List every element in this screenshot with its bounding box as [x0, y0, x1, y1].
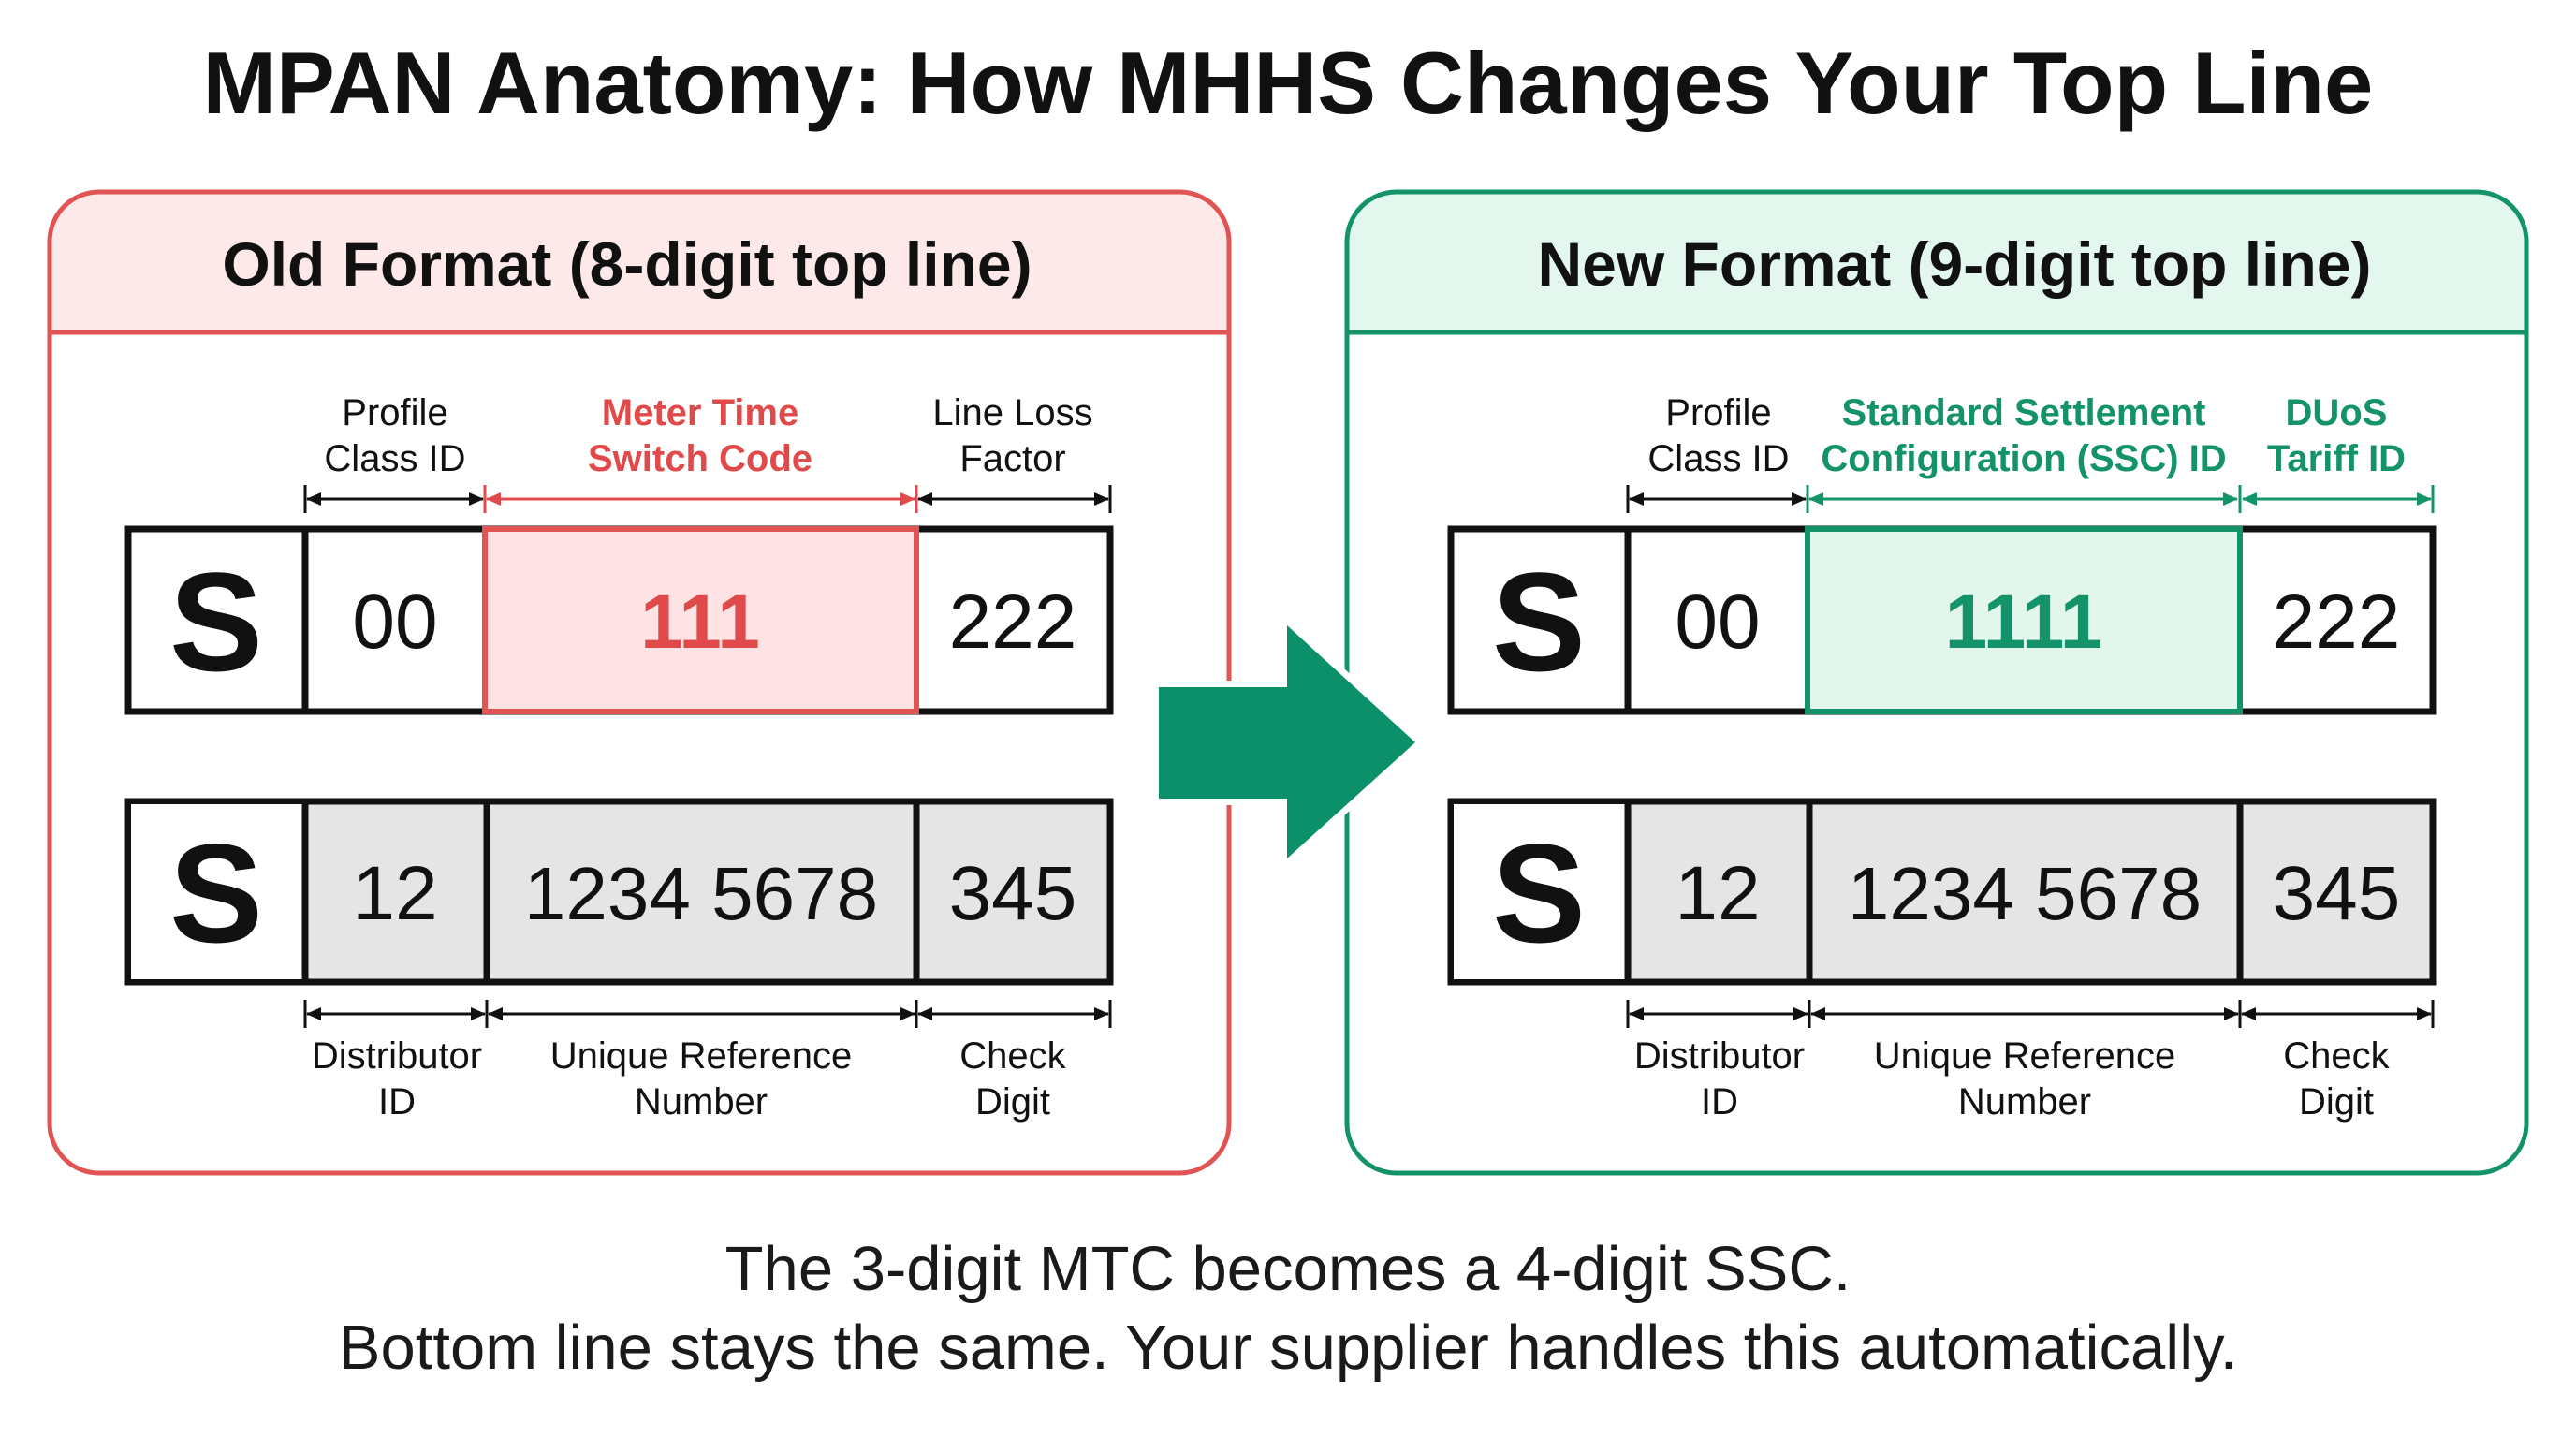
new bottom labels: Distributor [1634, 1035, 1805, 1077]
new top line boxes: 222 [2273, 580, 2400, 665]
new bottom line boxes: 345 [2273, 851, 2400, 936]
new top line boxes: 1111 [1945, 580, 2102, 665]
old top line boxes: 222 [949, 580, 1076, 665]
new top line boxes [1451, 529, 2433, 712]
new top labels: Configuration (SSC) ID [1821, 438, 2227, 479]
new top dimension arrows [1628, 485, 2433, 513]
old bottom line boxes: S [169, 814, 263, 972]
title: MPAN Anatomy: How MHHS Changes Your Top Line [203, 34, 2373, 132]
arrow: old to new [1159, 625, 1415, 858]
old bottom labels [312, 1035, 1067, 1123]
old bottom labels: Distributor [312, 1035, 482, 1077]
old bottom labels: Digit [975, 1081, 1050, 1123]
old top labels: Profile [342, 392, 448, 433]
old bottom labels: Unique Reference [550, 1035, 852, 1077]
old top labels: Line Loss [932, 392, 1093, 433]
old top line boxes: S [169, 543, 263, 700]
new heading: New Format (9-digit top line) [1538, 229, 2371, 299]
new bottom line boxes: 1234 5678 [1848, 852, 2202, 935]
old top line boxes: 00 [352, 580, 438, 665]
new top labels [1647, 392, 2406, 479]
old bottom labels: Number [635, 1081, 768, 1123]
new bottom labels: Digit [2299, 1081, 2374, 1123]
panel: old format [50, 192, 1229, 1173]
new top line boxes: 00 [1675, 580, 1761, 665]
old bottom line boxes: 1234 5678 [524, 852, 878, 935]
old bottom labels: Check [959, 1035, 1067, 1077]
new bottom line boxes: S [1492, 814, 1586, 972]
old bottom labels: ID [378, 1081, 416, 1123]
new bottom dimension arrows [1628, 1000, 2433, 1028]
new bottom labels [1634, 1035, 2391, 1123]
footer caption: The 3-digit MTC becomes a 4-digit SSC. [725, 1234, 1851, 1304]
new top labels: Profile [1665, 392, 1772, 433]
new bottom labels: Check [2283, 1035, 2391, 1077]
footer caption: Bottom line stays the same. Your supplier handles this automatically. [339, 1313, 2237, 1383]
old panel frame [50, 192, 1229, 1173]
old bottom line boxes [128, 801, 1110, 982]
new top labels: Class ID [1647, 438, 1790, 479]
old heading: Old Format (8-digit top line) [222, 229, 1032, 299]
new top line boxes: S [1492, 543, 1586, 700]
old top line boxes [128, 529, 1110, 712]
old top labels: Meter Time [602, 392, 798, 433]
new bottom labels: ID [1701, 1081, 1738, 1123]
panel: new format [1347, 192, 2526, 1173]
new bottom labels: Number [1958, 1081, 2091, 1123]
new bottom line boxes [1451, 801, 2433, 982]
old bottom line boxes: 12 [352, 851, 438, 936]
new bottom labels: Unique Reference [1874, 1035, 2175, 1077]
old top dimension arrows [305, 485, 1110, 513]
old top labels [324, 392, 1093, 479]
old top labels: Class ID [324, 438, 466, 479]
old bottom line boxes: 345 [949, 851, 1076, 936]
footer caption [339, 1234, 2237, 1383]
new top labels: Tariff ID [2267, 438, 2406, 479]
new top labels: DUoS [2286, 392, 2387, 433]
new top labels: Standard Settlement [1842, 392, 2205, 433]
new panel frame [1347, 192, 2526, 1173]
old top labels: Switch Code [588, 438, 812, 479]
old bottom dimension arrows [305, 1000, 1110, 1028]
old top labels: Factor [959, 438, 1066, 479]
new bottom line boxes: 12 [1675, 851, 1761, 936]
old top line boxes: 111 [640, 580, 760, 665]
